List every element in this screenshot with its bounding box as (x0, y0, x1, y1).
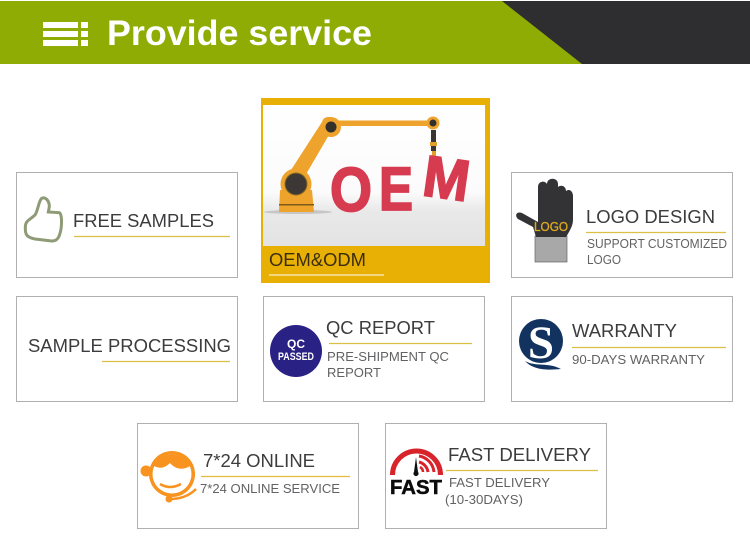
description: FAST DELIVERY (449, 476, 551, 490)
panel: sample processing (16, 296, 238, 402)
header banner (0, 1, 750, 64)
OEM letters: O (330, 156, 372, 225)
icon: thumbs up (25, 198, 62, 241)
description (445, 476, 551, 507)
title: Provide service (107, 14, 372, 53)
description: LOGO (587, 253, 621, 267)
heading: WARRANTY (572, 321, 677, 341)
logo on glove: LOGO (534, 220, 568, 234)
description (327, 350, 449, 380)
description: SUPPORT CUSTOMIZED (587, 237, 727, 251)
icon: headset agent (140, 451, 196, 502)
icon: glove (516, 179, 573, 262)
panel: 7*24 online (138, 424, 358, 528)
icon: QC passed badge (270, 325, 322, 377)
icon: robot arm (264, 116, 440, 214)
panel: OEM and ODM (261, 98, 490, 283)
panel: warranty (512, 296, 732, 402)
caption: OEM&ODM (269, 250, 366, 270)
icon: QC passed badge: QC (287, 337, 305, 351)
OEM letters: M (419, 144, 474, 214)
icon: SQ logo (519, 317, 563, 370)
panel: logo design (512, 172, 732, 278)
panel: free samples (16, 172, 238, 278)
icon: menu list (43, 22, 88, 46)
description: (10-30DAYS) (445, 493, 523, 507)
heading: QC REPORT (326, 318, 435, 338)
heading: SAMPLE PROCESSING (28, 336, 231, 356)
description: 90-DAYS WARRANTY (572, 353, 706, 367)
panel: QC report (264, 296, 484, 402)
description: PRE-SHIPMENT QC (327, 350, 449, 364)
panel: fast delivery (386, 424, 606, 528)
description (587, 237, 727, 267)
description: 7*24 ONLINE SERVICE (200, 482, 340, 496)
heading: FREE SAMPLES (73, 211, 214, 231)
OEM letters: E (379, 155, 413, 223)
heading: LOGO DESIGN (586, 207, 715, 227)
heading: FAST DELIVERY (448, 445, 591, 465)
icon: FAST speedometer: FAST (390, 477, 442, 499)
icon: FAST speedometer (390, 451, 442, 499)
icon: QC passed badge: PASSED (278, 351, 314, 363)
OEM letters (330, 144, 474, 225)
icon: SQ logo: S (528, 317, 554, 369)
heading: 7*24 ONLINE (203, 451, 315, 471)
description: REPORT (327, 366, 381, 380)
